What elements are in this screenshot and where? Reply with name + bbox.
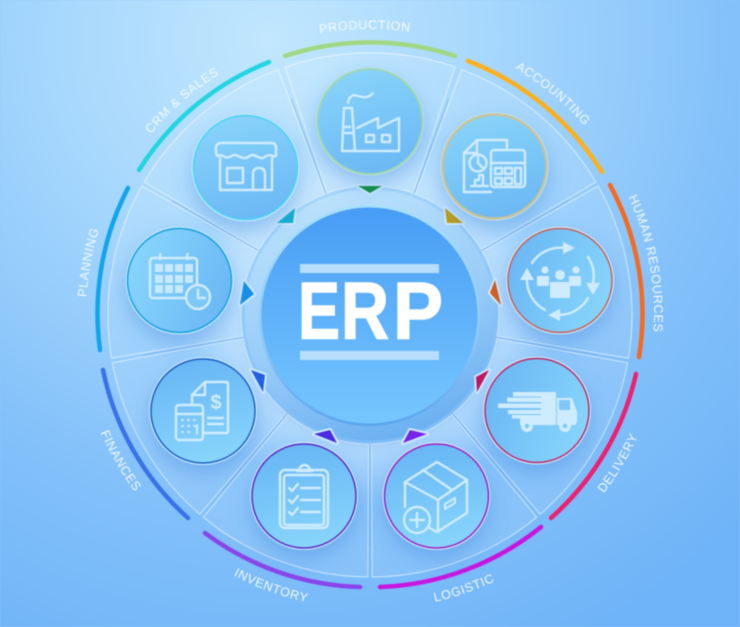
central hub	[244, 190, 496, 440]
label: production: PRODUCTION	[319, 20, 410, 34]
ERP top bar	[300, 264, 439, 273]
ERP bottom bar	[300, 351, 439, 360]
icon: shop	[216, 143, 276, 190]
ERP title: E	[298, 266, 340, 356]
hub pointers	[240, 186, 501, 443]
icon: report and calculator	[464, 140, 525, 192]
badge: production	[316, 68, 424, 176]
label: inventory: INVENTORY	[234, 568, 308, 602]
badge: human resources	[506, 226, 614, 334]
label: crm and sales: CRM & SALES	[146, 68, 218, 133]
icon: calendar and clock	[150, 253, 210, 309]
icon: factory	[342, 93, 399, 151]
wheel sectors	[97, 53, 643, 591]
icon: checklist	[280, 465, 328, 528]
icon: package	[404, 462, 467, 533]
label: human resources: HUMAN RESOURCES	[628, 194, 664, 332]
label: delivery: DELIVERY	[597, 432, 637, 493]
badge: planning	[126, 226, 234, 334]
outer coloured arcs	[97, 42, 642, 587]
ERP title: R	[341, 266, 389, 356]
label: finances: FINANCES	[100, 430, 141, 491]
label: planning: PLANNING	[77, 228, 98, 297]
label: accounting: ACCOUNTING	[515, 62, 590, 125]
icon: team cycle	[520, 242, 600, 321]
badge: finances	[149, 357, 257, 465]
ERP title	[298, 266, 443, 356]
badge: crm and sales	[192, 114, 300, 222]
badge: delivery	[483, 356, 591, 464]
icon: truck	[498, 392, 577, 432]
badge: inventory	[250, 442, 358, 550]
badge: accounting	[440, 112, 548, 220]
label: logistic: LOGISTIC	[433, 574, 494, 602]
icon: invoice and calculator: $	[210, 392, 222, 414]
ERP title: P	[393, 266, 443, 356]
badge: logistic	[382, 442, 490, 550]
